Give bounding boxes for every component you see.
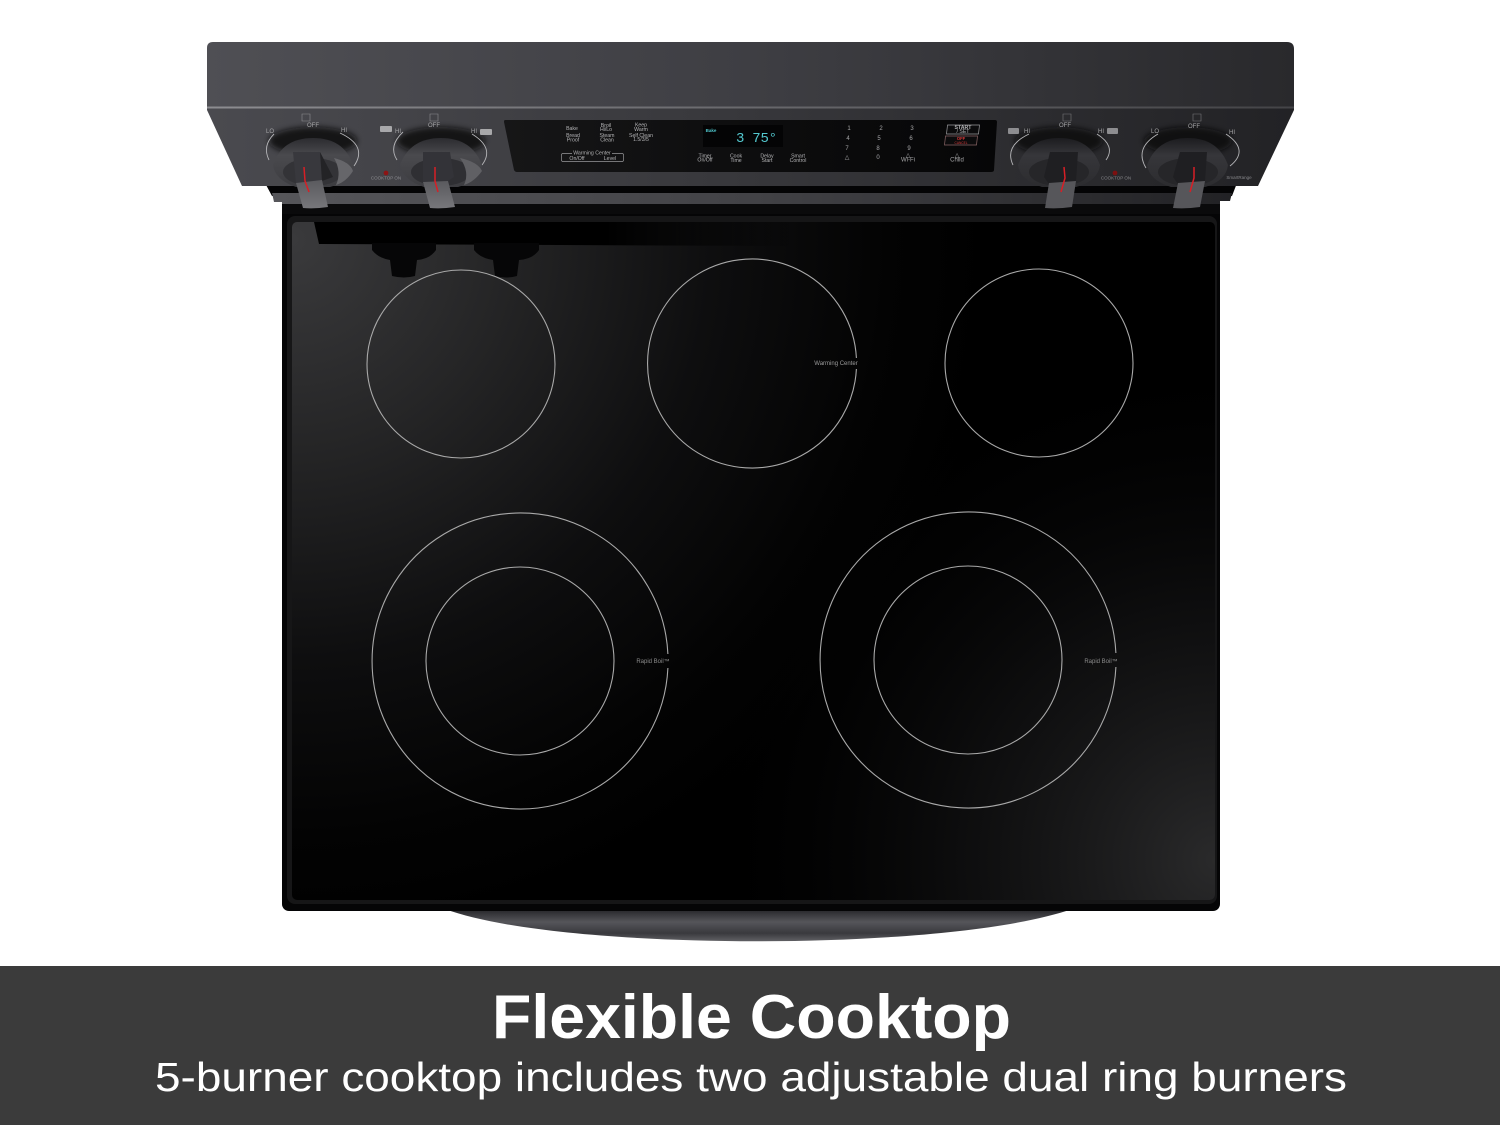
oven function labels: Self Clean [629, 133, 653, 139]
timer labels: On/Off [697, 158, 713, 164]
subtitle: 5-burner cooktop includes two adjustable dual ring burners [155, 1054, 1347, 1100]
oven function labels: Warm [634, 127, 648, 133]
smart range label: SmartRange [1226, 175, 1252, 180]
knob 4: OFF [1188, 124, 1200, 130]
number keypad [845, 126, 964, 164]
number keypad: Child [950, 158, 964, 164]
hot surface indicator left [371, 171, 401, 180]
number keypad: 9 [907, 146, 911, 152]
oven function labels: Hi/Lo [600, 127, 612, 133]
number keypad: 0 [876, 155, 880, 161]
timer labels: Control [790, 158, 806, 164]
oven function labels: 1.5/3/5 [633, 137, 649, 143]
console lower strip [265, 183, 1237, 214]
number keypad: △ [845, 155, 850, 161]
start and off buttons: / SET [957, 129, 970, 135]
cooktop frame [282, 200, 1220, 911]
number keypad: 1 [847, 126, 851, 132]
knob 1: HI [341, 128, 347, 134]
timer labels: Timer [698, 154, 712, 160]
number keypad: 3 [910, 126, 914, 132]
knob 1: OFF [307, 123, 319, 129]
burner: rear left [367, 270, 555, 458]
console front face [207, 108, 1294, 186]
knob 4: LO [1151, 129, 1159, 135]
oven function labels: Broil [601, 123, 611, 129]
number keypad: 2 [879, 126, 883, 132]
scale arcs [266, 133, 359, 166]
knob 3: HI [1098, 129, 1104, 135]
oven function labels: Steam [600, 133, 614, 139]
knob 2: OFF [428, 123, 440, 129]
knob 1 [266, 114, 359, 208]
timer labels: Smart [791, 154, 805, 160]
oven function labels: Proof [567, 138, 580, 144]
burner: front right dual ring: Rapid Boil™ [1084, 658, 1118, 665]
glass surface [292, 222, 1215, 900]
number keypad: Wi-Fi [901, 158, 915, 164]
number keypad: 7 [845, 146, 849, 152]
oven function labels: Clean [600, 138, 614, 144]
oven display [703, 125, 783, 147]
timer labels: Time [730, 158, 742, 164]
knob 2: HI [395, 129, 401, 135]
burner: rear right [945, 269, 1133, 457]
scale arcs [394, 132, 487, 165]
number keypad: 4 [846, 136, 850, 142]
start and off buttons [944, 125, 980, 145]
timer labels: Delay [760, 154, 774, 160]
knob 1: LO [266, 129, 274, 135]
base plate [282, 200, 1220, 941]
hot surface indicator left: COOKTOP ON [371, 176, 401, 180]
warming center control: Warming Center [573, 150, 611, 156]
start and off buttons: CANCEL [955, 141, 968, 145]
knob 2 [380, 114, 492, 208]
number keypad: △ [955, 153, 960, 159]
number keypad: 6 [909, 136, 913, 142]
timer labels: Start [762, 158, 773, 164]
knob 4: HI [1229, 130, 1235, 136]
oven function labels [566, 122, 653, 144]
burner: front left dual ring [372, 513, 670, 809]
scale arcs [1142, 134, 1239, 168]
hot surface indicator right: COOKTOP ON [1101, 176, 1131, 180]
number keypad: 5 [877, 136, 881, 142]
knob 4 [1142, 114, 1252, 208]
timer labels [697, 154, 806, 164]
warming center control: On/Off [569, 156, 585, 162]
oven display: Bake [706, 128, 717, 133]
hot surface indicator right [1101, 171, 1131, 180]
oven function labels: Bake [566, 126, 578, 132]
burner: front left dual ring: Rapid Boil™ [636, 658, 670, 665]
oven function labels: Bread [566, 133, 580, 139]
oven function labels: Keep [635, 122, 647, 128]
caption band [0, 966, 1500, 1125]
panel reflection on glass [314, 222, 800, 278]
knob 2: HI [471, 129, 477, 135]
start and off buttons: OFF [957, 136, 966, 141]
knob 3: OFF [1059, 123, 1071, 129]
oven display: 3 75° [736, 131, 777, 147]
warming center control: Level [604, 156, 616, 162]
number keypad: 8 [876, 146, 880, 152]
timer labels: Cook [730, 154, 742, 160]
warming center control [562, 150, 624, 162]
number keypad: △ [906, 153, 911, 159]
burner: warming center: Warming Center [814, 361, 858, 367]
scale arcs [1011, 134, 1109, 165]
title: Flexible Cooktop [492, 983, 1011, 1052]
burner: warming center [648, 259, 858, 468]
control console [207, 42, 1294, 214]
display panel [504, 120, 997, 172]
knob 3: HI [1024, 129, 1030, 135]
burner: front right dual ring [820, 512, 1118, 808]
console top surface [207, 42, 1294, 108]
start and off buttons: START [955, 125, 972, 131]
range foot [445, 909, 1072, 941]
knob 3 [1008, 114, 1118, 208]
